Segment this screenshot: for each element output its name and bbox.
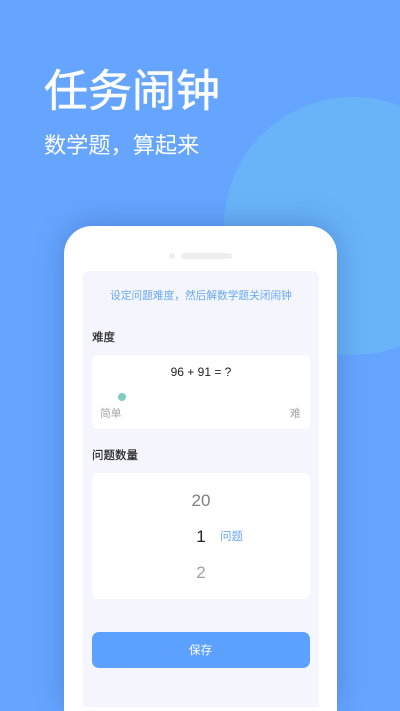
picker value: 1: 1 — [196, 527, 206, 546]
panel: phone mockup — [64, 226, 337, 711]
heading: difficulty: 难度 — [92, 332, 115, 344]
instruction text: 设定问题难度，然后解数学题关闭闹钟 — [110, 290, 292, 302]
picker value: 20: 20 — [192, 491, 210, 510]
heading: question count: 问题数量 — [92, 450, 138, 462]
label: hard: 难 — [290, 408, 301, 420]
save button: 保存 — [189, 645, 212, 657]
slider handle — [118, 393, 126, 401]
subtitle: 数学题，算起来 — [44, 133, 199, 158]
label: easy: 简单 — [100, 408, 122, 420]
math equation: 96 + 91 = ? — [171, 365, 231, 379]
picker unit label: 问题 — [220, 531, 243, 543]
decorative circle — [224, 97, 400, 355]
icon: phone camera — [169, 253, 175, 259]
save button — [92, 632, 310, 668]
icon: phone speaker — [181, 253, 232, 259]
panel: app screen — [83, 271, 319, 707]
picker value: 2: 2 — [196, 563, 206, 582]
title: 任务闹钟 — [44, 67, 220, 116]
panel: question count picker — [92, 473, 310, 599]
panel: difficulty card — [92, 355, 310, 429]
